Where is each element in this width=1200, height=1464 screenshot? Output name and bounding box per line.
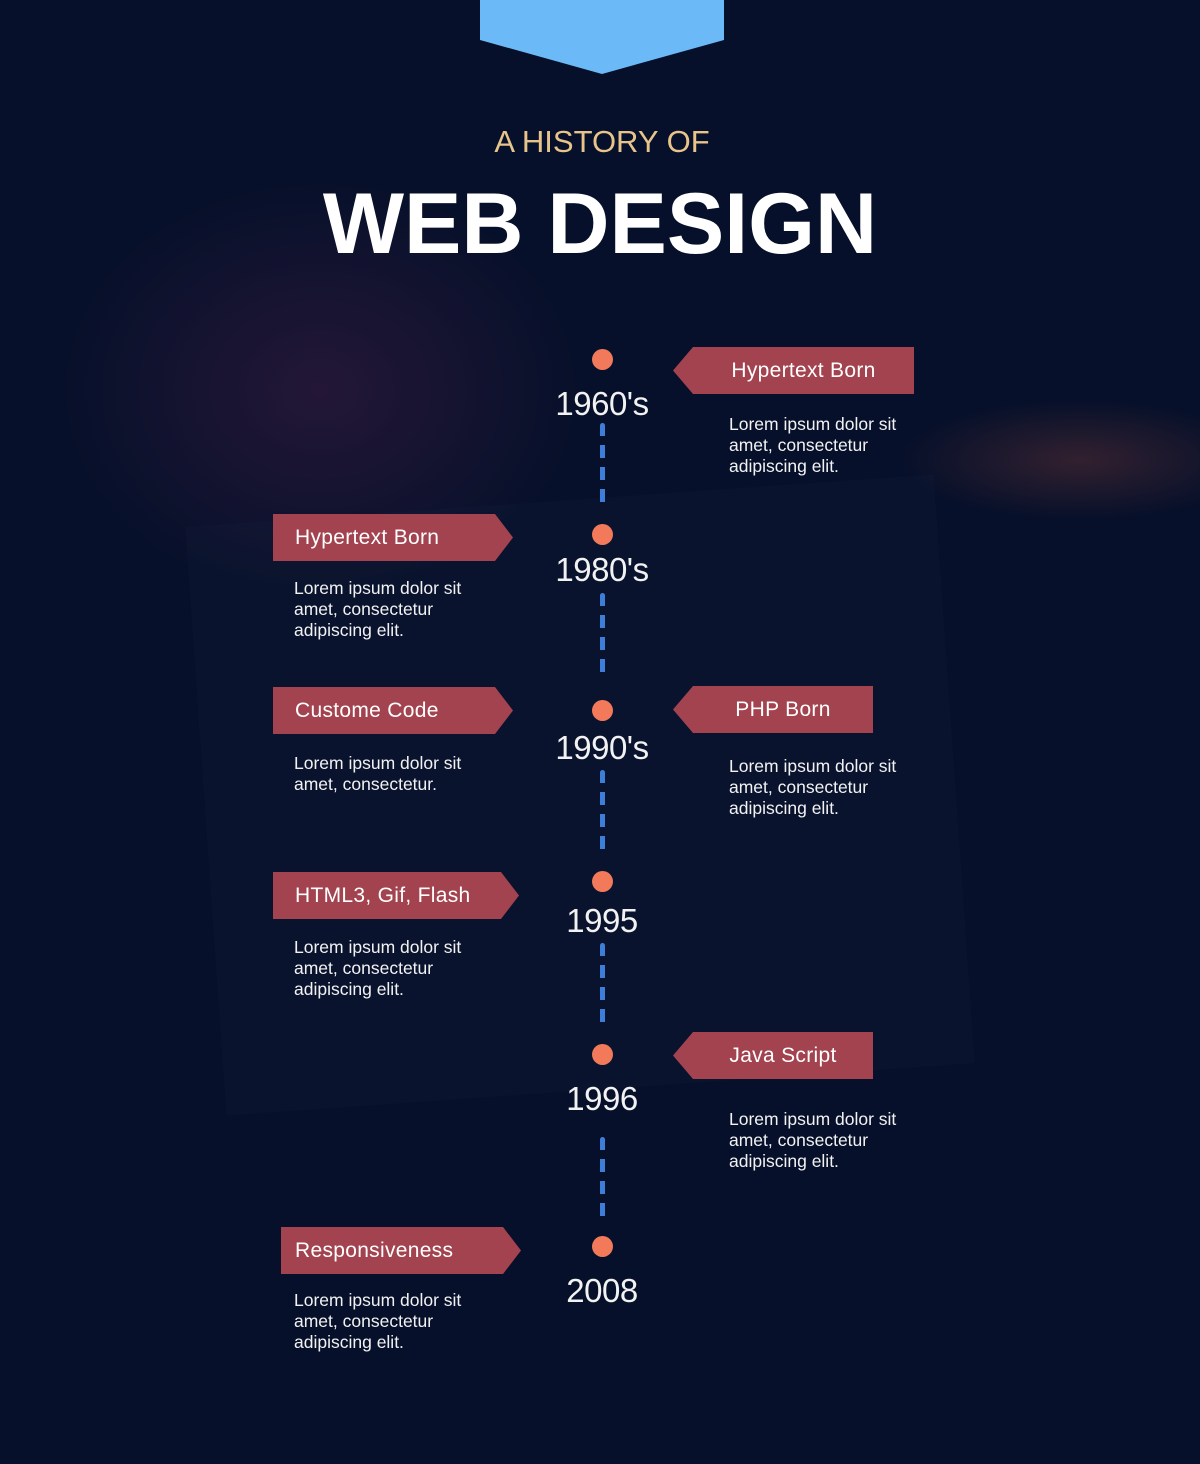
year 1990: 1990's	[555, 729, 649, 766]
dot 1996	[592, 1044, 613, 1065]
event 1960	[673, 347, 914, 476]
dot 1980	[592, 524, 613, 545]
text: Lorem ipsum dolor sit amet, consectetur adipiscing elit.	[729, 756, 896, 818]
label	[673, 347, 914, 394]
event custom code	[273, 687, 513, 794]
text: Lorem ipsum dolor sit amet, consectetur.	[294, 753, 461, 794]
label	[273, 687, 513, 734]
event 1980	[273, 514, 513, 640]
label	[273, 514, 513, 561]
label: Hypertext Born	[731, 359, 876, 382]
dash line	[600, 423, 605, 511]
event HTML3	[273, 872, 519, 999]
text: Lorem ipsum dolor sit amet, consectetur adipiscing elit.	[294, 1290, 461, 1352]
dot 1990	[592, 700, 613, 721]
text: Lorem ipsum dolor sit amet, consectetur adipiscing elit.	[294, 578, 461, 640]
year 1996: 1996	[566, 1080, 638, 1117]
dot 2008	[592, 1236, 613, 1257]
top banner tab	[480, 0, 724, 74]
title: WEB DESIGN	[323, 176, 877, 272]
dot 1960	[592, 349, 613, 370]
event Responsiveness	[281, 1227, 521, 1352]
dash line	[600, 1137, 605, 1225]
label	[673, 686, 873, 733]
label: Hypertext Born	[295, 526, 439, 549]
text: Lorem ipsum dolor sit amet, consectetur adipiscing elit.	[729, 1109, 896, 1171]
label: Java Script	[729, 1044, 837, 1067]
event Java Script	[673, 1032, 896, 1171]
year 1980: 1980's	[555, 551, 649, 588]
event PHP	[673, 686, 896, 818]
text: Lorem ipsum dolor sit amet, consectetur adipiscing elit.	[729, 414, 896, 476]
label	[281, 1227, 521, 1274]
year 1960: 1960's	[555, 385, 649, 422]
dash line	[600, 593, 605, 681]
label: Responsiveness	[295, 1239, 453, 1262]
dash line	[600, 770, 605, 858]
year 1995: 1995	[566, 902, 638, 939]
label	[273, 872, 519, 919]
text: Lorem ipsum dolor sit amet, consectetur adipiscing elit.	[294, 937, 461, 999]
label	[673, 1032, 873, 1079]
year 2008: 2008	[566, 1272, 638, 1309]
label: Custome Code	[295, 699, 439, 722]
subtitle: A HISTORY OF	[494, 124, 710, 159]
label: PHP Born	[735, 698, 831, 721]
dot 1995	[592, 871, 613, 892]
dash line	[600, 943, 605, 1031]
label: HTML3, Gif, Flash	[295, 884, 470, 907]
